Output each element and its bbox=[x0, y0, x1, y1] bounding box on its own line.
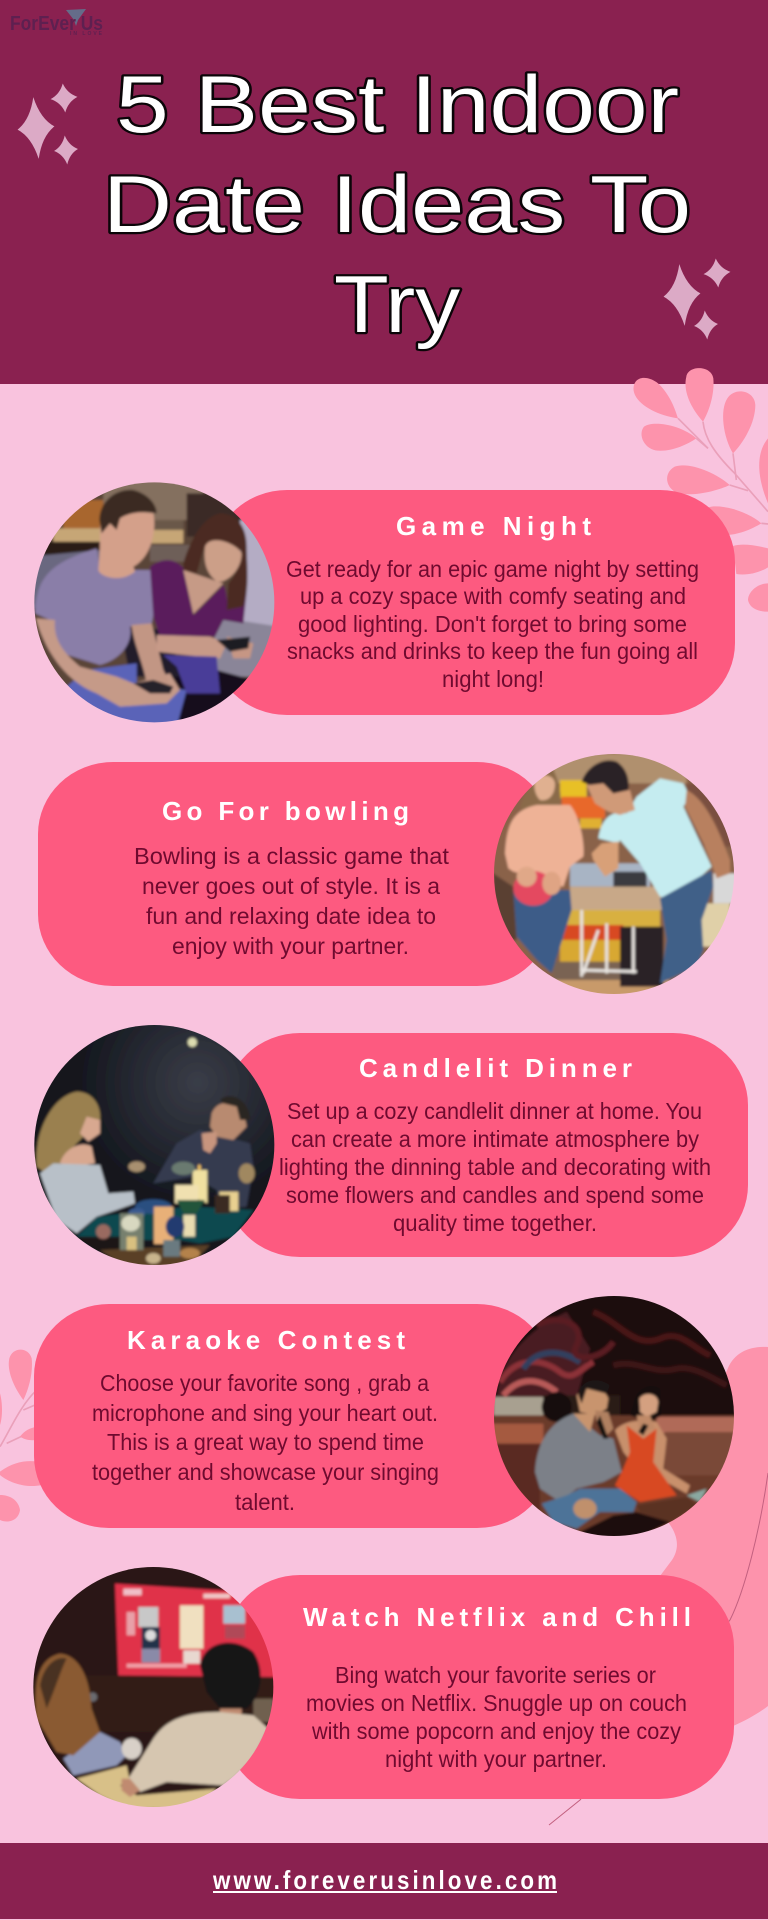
photo: candlelit dinner couple bbox=[30, 1020, 280, 1270]
body text: up a cozy space with comfy seating and bbox=[300, 583, 686, 609]
body text: night with your partner. bbox=[385, 1746, 607, 1772]
title bbox=[103, 60, 691, 350]
header band bbox=[0, 0, 768, 384]
body text: lighting the dinning table and decorating with bbox=[279, 1154, 711, 1180]
body text: movies on Netflix. Snuggle up on couch bbox=[306, 1690, 687, 1716]
body text: Bing watch your favorite series or bbox=[335, 1662, 656, 1688]
leaves left bbox=[0, 1350, 42, 1522]
website url: www.foreverusinlove.com bbox=[212, 1866, 557, 1895]
body text: Bowling is a classic game that bbox=[134, 843, 450, 869]
heading: Candlelit Dinner bbox=[359, 1053, 632, 1083]
icon: sparkles right bbox=[661, 257, 732, 340]
panel: go for bowling bbox=[38, 754, 734, 994]
body text: enjoy with your partner. bbox=[172, 933, 409, 959]
panel: karaoke contest bbox=[34, 1296, 734, 1536]
panel: game night bbox=[34, 482, 735, 722]
body text: can create a more intimate atmosphere by bbox=[291, 1126, 699, 1152]
body text: talent. bbox=[235, 1489, 295, 1515]
body text: some flowers and candles and spend some bbox=[286, 1182, 704, 1208]
body text: good lighting. Don't forget to bring some bbox=[298, 611, 687, 637]
heading: Karaoke Contest bbox=[127, 1325, 405, 1355]
decorative line bbox=[549, 1473, 768, 1825]
body text: Get ready for an epic game night by setting bbox=[286, 556, 699, 582]
body text bbox=[279, 1098, 711, 1236]
body text: with some popcorn and enjoy the cozy bbox=[311, 1718, 681, 1744]
photo: couple watching television bbox=[33, 1567, 274, 1807]
background blob lower right bbox=[660, 1347, 768, 1740]
body text bbox=[134, 843, 450, 959]
photo: couple bowling bbox=[494, 754, 734, 994]
photo: couple singing karaoke bbox=[494, 1296, 734, 1536]
body text: fun and relaxing date idea to bbox=[146, 903, 436, 929]
body text: together and showcase your singing bbox=[92, 1459, 439, 1485]
title: 5 Best Indoor bbox=[116, 60, 679, 150]
body text: microphone and sing your heart out. bbox=[92, 1400, 438, 1426]
logo: IN LOVE bbox=[70, 31, 103, 37]
body text bbox=[306, 1662, 687, 1772]
panel: netflix and chill bbox=[33, 1567, 734, 1807]
photo: couple playing video games bbox=[34, 482, 274, 722]
body text: snacks and drinks to keep the fun going all bbox=[287, 638, 698, 664]
heading: Watch Netflix and Chill bbox=[303, 1602, 691, 1632]
icon: sparkles left bbox=[15, 82, 79, 165]
body text: Choose your favorite song , grab a bbox=[100, 1370, 429, 1396]
panel: candlelit dinner bbox=[30, 1020, 748, 1270]
title: Try bbox=[334, 260, 461, 350]
body text: quality time together. bbox=[393, 1210, 597, 1236]
footer band bbox=[0, 1843, 768, 1919]
title: Date Ideas To bbox=[103, 160, 691, 250]
leaves top right bbox=[633, 368, 768, 612]
body text: This is a great way to spend time bbox=[107, 1429, 424, 1455]
body text: Set up a cozy candlelit dinner at home. You bbox=[287, 1098, 702, 1124]
body text bbox=[286, 556, 699, 692]
heading: Game Night bbox=[396, 511, 591, 541]
body text: night long! bbox=[442, 666, 544, 692]
heading: Go For bowling bbox=[162, 796, 409, 826]
body text bbox=[92, 1370, 439, 1515]
logo: ForEver Us bbox=[10, 13, 103, 35]
body text: never goes out of style. It is a bbox=[142, 873, 440, 899]
